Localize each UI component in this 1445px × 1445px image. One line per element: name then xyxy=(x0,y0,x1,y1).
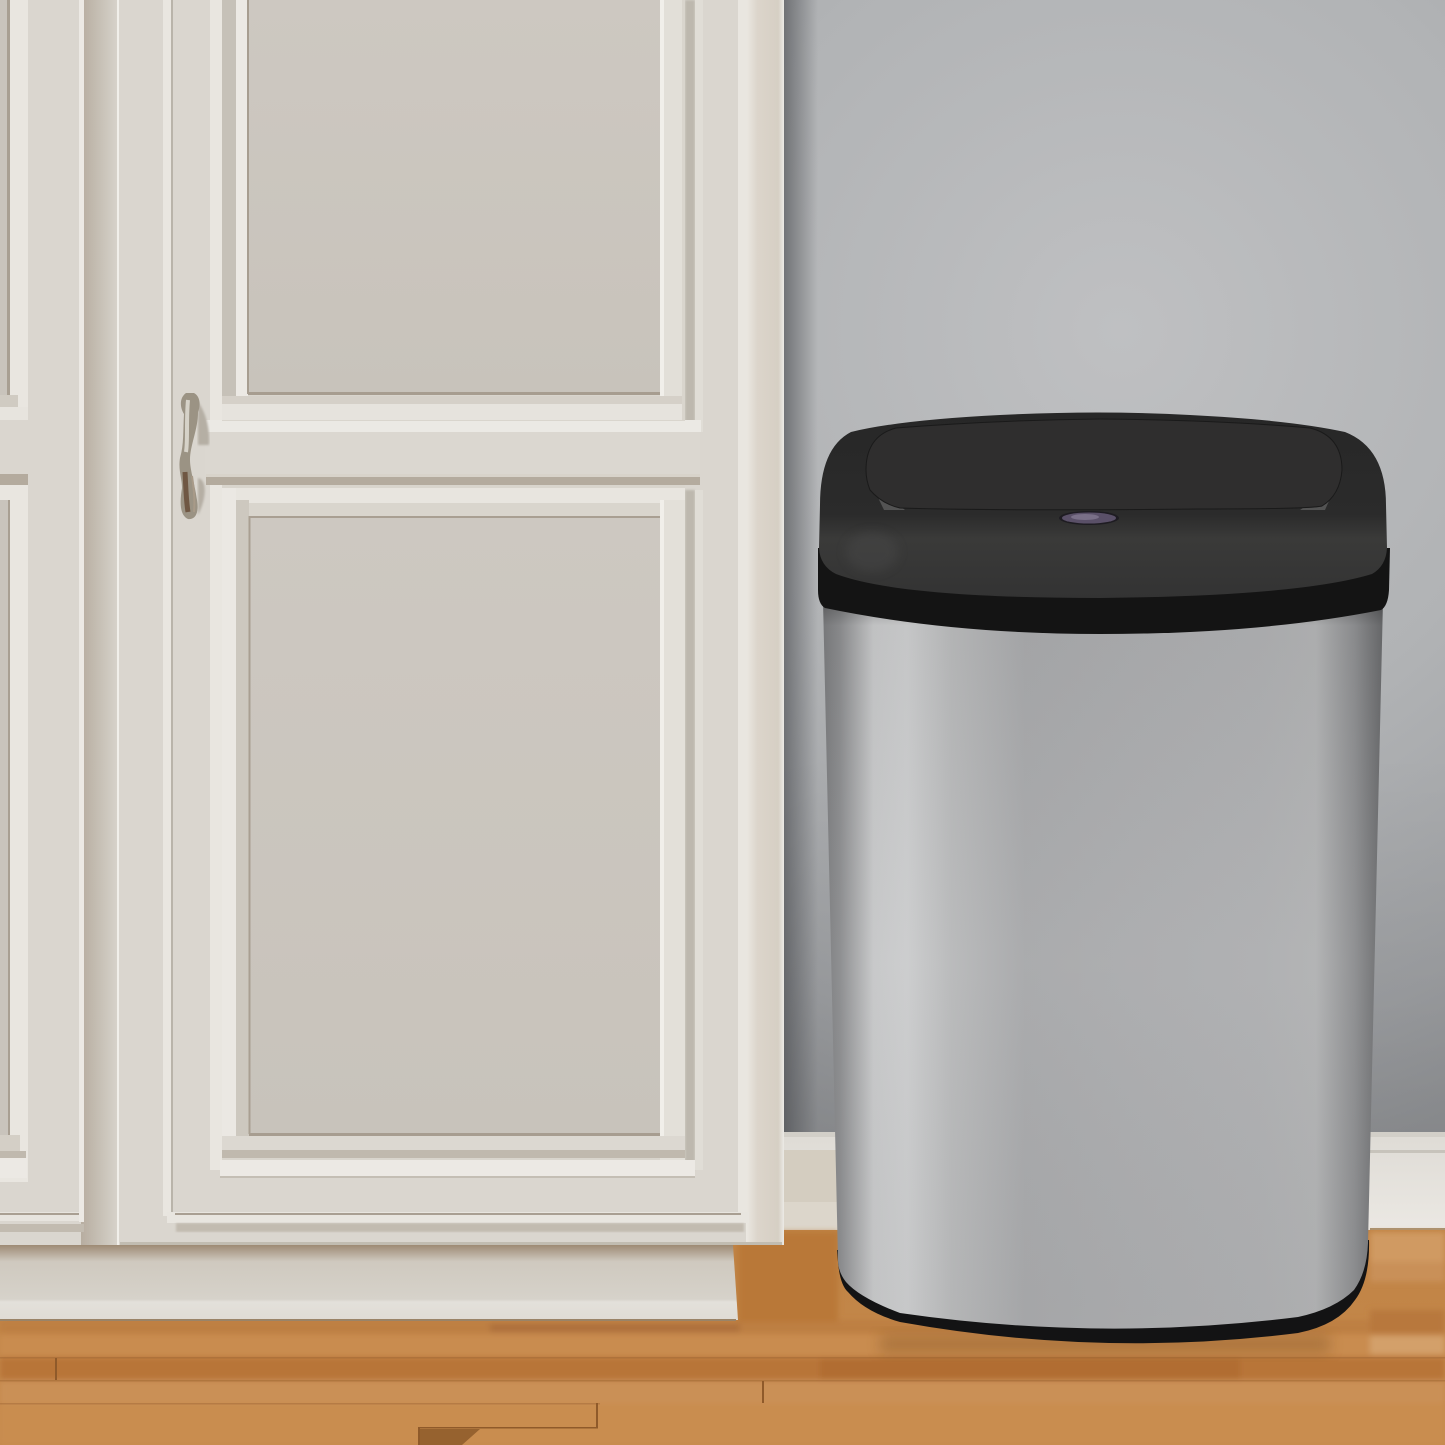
handle xyxy=(179,393,209,519)
stainless steel body xyxy=(823,600,1383,1329)
swing flap xyxy=(866,419,1342,510)
floor boards xyxy=(0,1232,1445,1445)
black base ring xyxy=(837,1240,1369,1343)
floor shadow under can xyxy=(880,1335,1330,1353)
trash can xyxy=(818,412,1390,1343)
mid rail xyxy=(205,432,700,475)
motion sensor xyxy=(1059,511,1119,525)
left door panels xyxy=(0,0,84,1232)
black collar band xyxy=(818,548,1390,634)
side post xyxy=(746,0,784,1245)
upper door panel xyxy=(222,0,685,421)
door bottom moulding xyxy=(167,1212,749,1223)
lid housing xyxy=(819,412,1387,598)
wall xyxy=(784,0,1445,1135)
gap between doors xyxy=(81,0,119,1245)
lid highlight xyxy=(846,532,898,572)
cabinet base colour xyxy=(0,0,784,1245)
toe kick xyxy=(0,1245,738,1320)
cabinet xyxy=(0,0,784,1321)
door stile highlights xyxy=(163,0,172,1216)
right moulding shadow xyxy=(685,0,695,432)
lower door panel xyxy=(220,485,695,1178)
wood floor xyxy=(0,1230,1445,1445)
baseboard xyxy=(782,1132,1445,1231)
